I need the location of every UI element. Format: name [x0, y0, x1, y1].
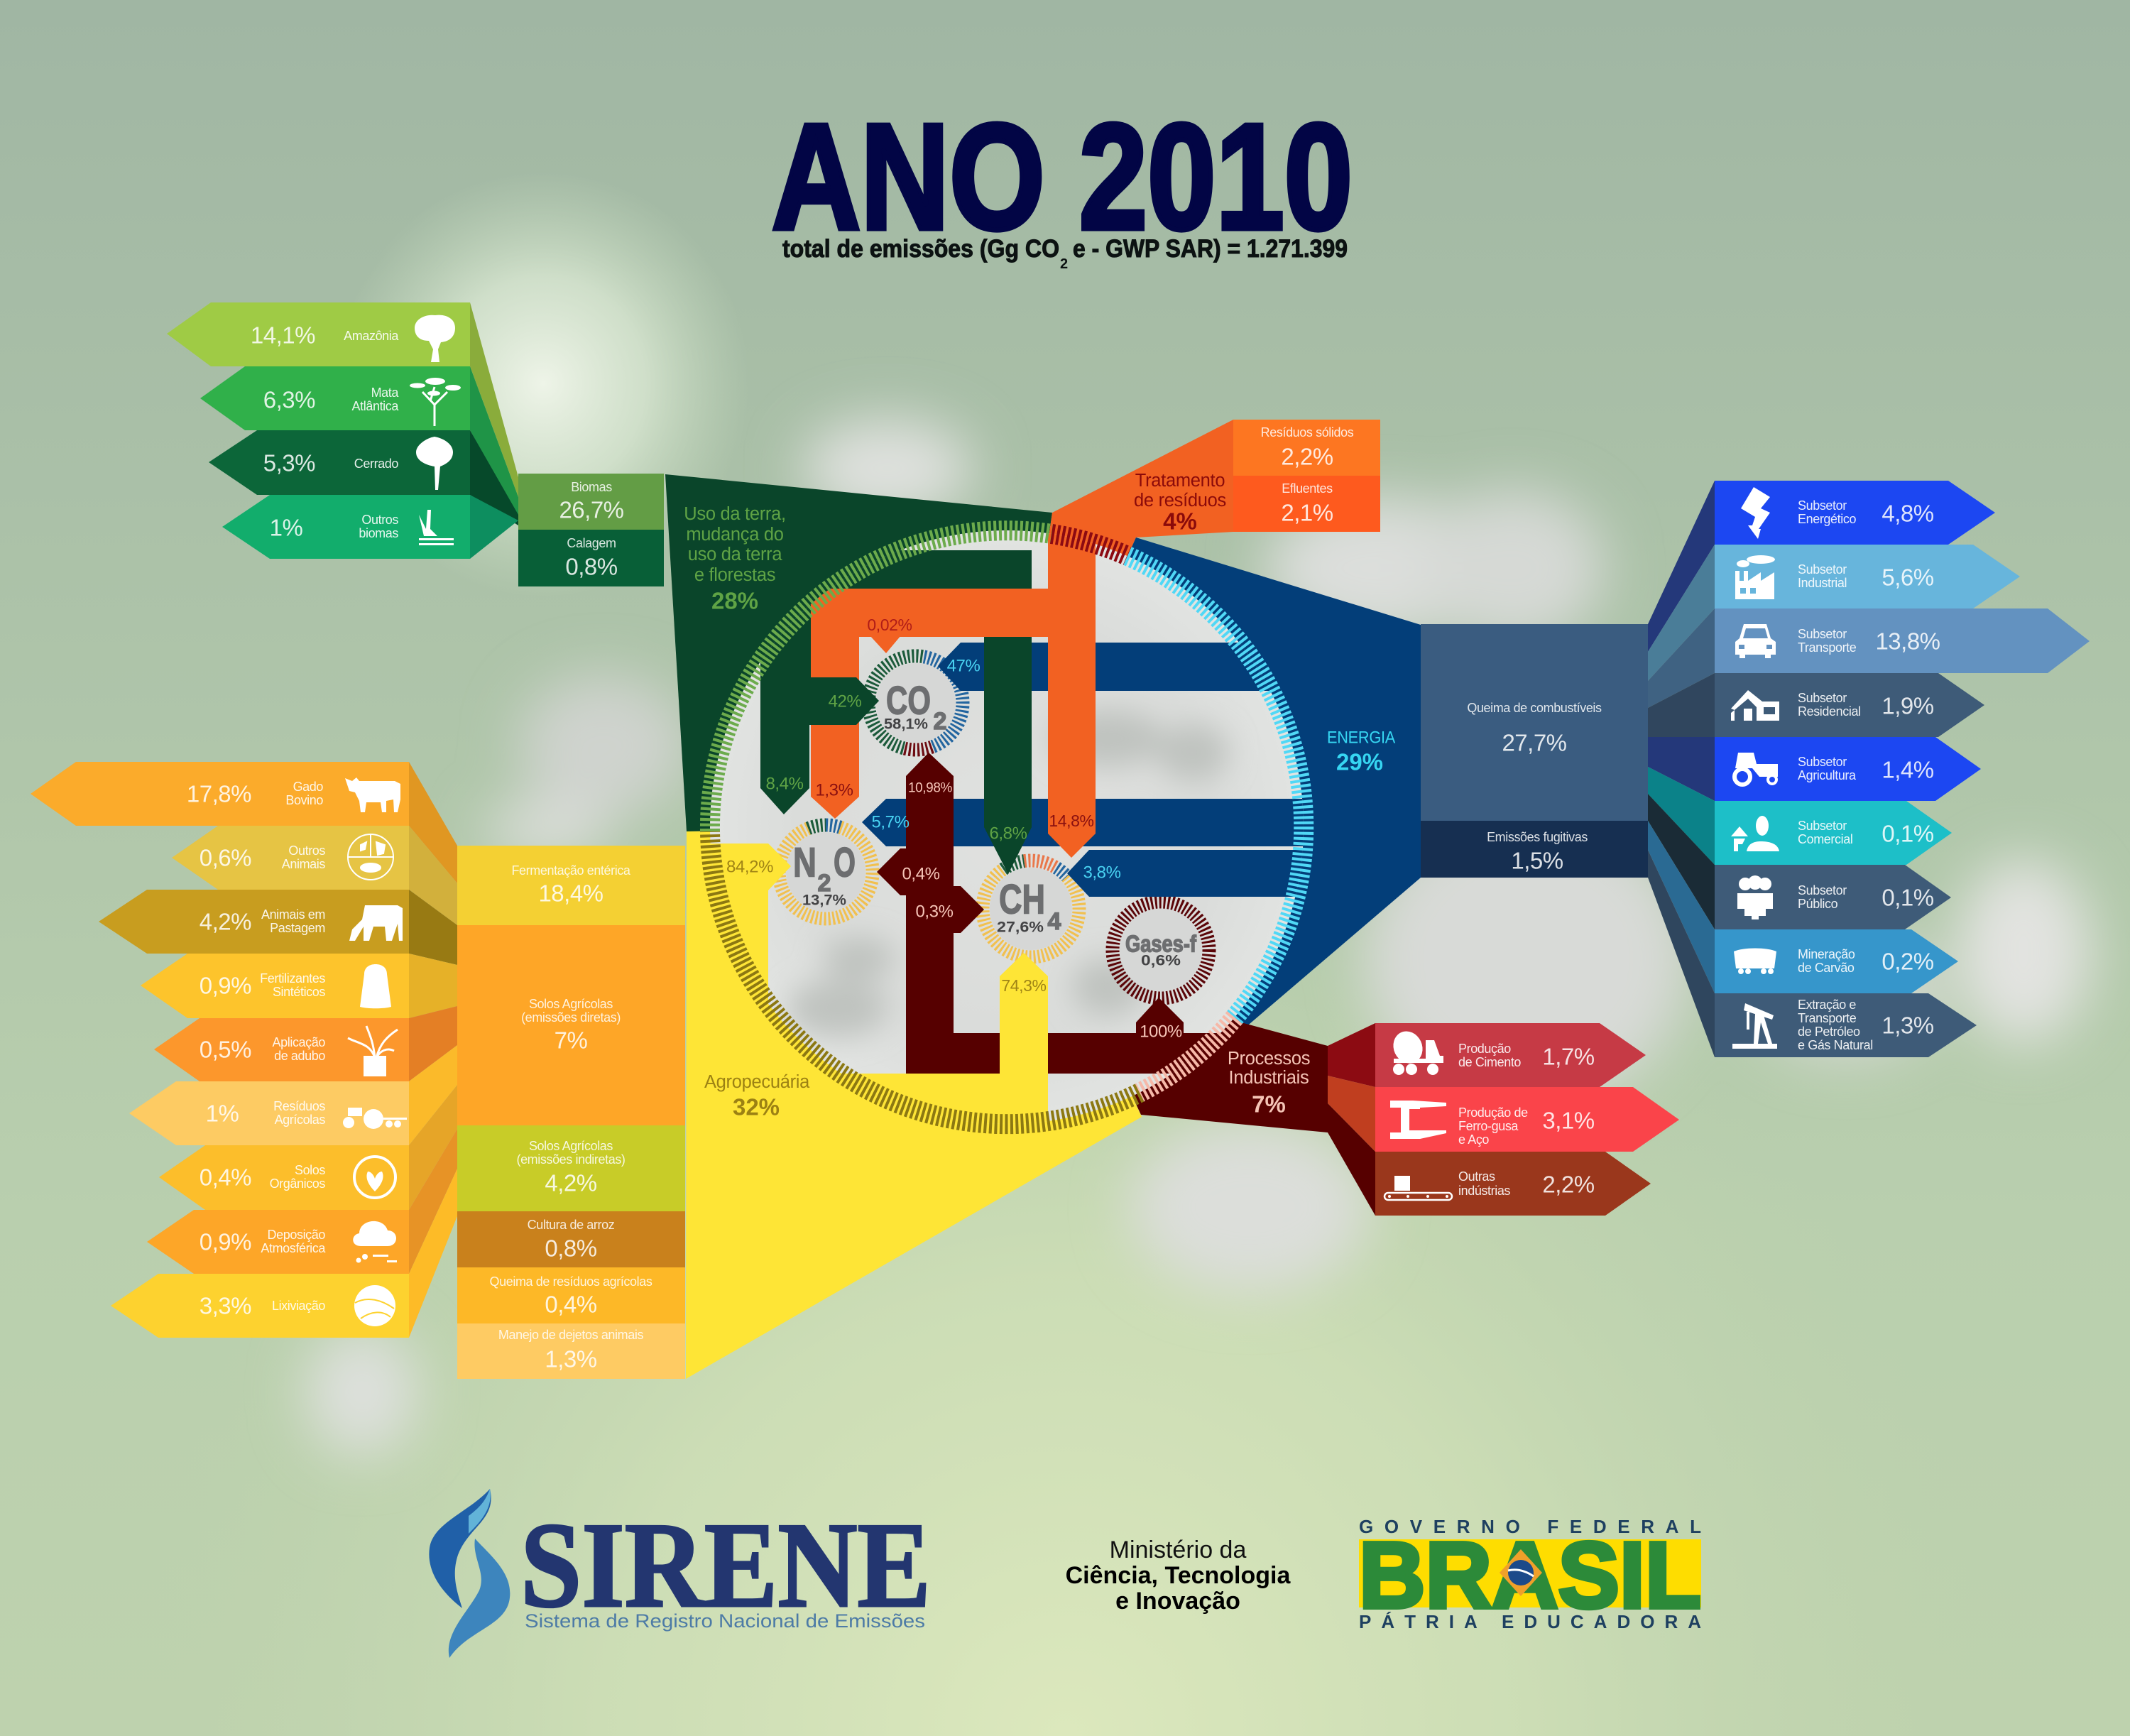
panel: Mineração de Carvão: de Carvão [1798, 961, 1855, 975]
panel: Amazônia: Amazônia [344, 329, 399, 343]
icon: conveyor [1384, 1176, 1452, 1200]
panel: Mata Atlântica [200, 366, 470, 430]
flow percent labels: 42% [829, 692, 861, 711]
panel: Processos heading [1228, 1049, 1310, 1118]
subtitle: total de emissões (Gg CO [782, 235, 1059, 263]
panel: Tratamento heading: Tratamento [1135, 471, 1225, 491]
panel: Deposição Atmosférica: Deposição [268, 1228, 325, 1242]
panel: Deposição Atmosférica [147, 1210, 409, 1274]
panel: Biomas box: 26,7% [559, 497, 624, 523]
panel: Emissões fugitivas: 1,5% [1511, 848, 1563, 873]
panel: Subsetor Residencial: Subsetor [1798, 691, 1847, 705]
panel: Subsetor Agricultura [1715, 737, 1981, 801]
panel: Efluentes box: Efluentes [1282, 481, 1333, 496]
panel: Solos Agrícolas diretas: 7% [555, 1027, 588, 1054]
panel: Aplicação de adubo [154, 1018, 409, 1081]
connectors: processos [1328, 1023, 1375, 1216]
panel: Extração de Petróleo: Extração e [1798, 998, 1856, 1012]
panel: Outros biomas [222, 495, 470, 559]
wedge: Processos Industriais [1007, 827, 1328, 1132]
flow: agropecuária bands [710, 844, 1048, 1124]
flow: energia bands [862, 643, 1321, 897]
panel: Processos heading: Processos [1228, 1049, 1310, 1069]
panel: Extração de Petróleo [1715, 993, 1977, 1057]
molecule: CO2: 58,1% [884, 716, 928, 733]
panel: Amazônia [167, 302, 470, 366]
molecule: N2O: 2 [818, 870, 831, 897]
panel: Cerrado: 5,3% [263, 450, 315, 476]
panel: Solos Agrícolas indiretas [457, 1125, 685, 1211]
logo: Governo Federal Brasil: PÁTRIA EDUCADORA [1359, 1611, 1701, 1632]
panel: Gado Bovino: 17,8% [187, 781, 251, 807]
panel: Queima de resíduos: Queima de resíduos agrícolas [490, 1274, 652, 1289]
panel: Solos Agrícolas indiretas: Solos Agrícolas [529, 1139, 613, 1153]
molecule: CH4: 27,6% [997, 919, 1044, 936]
molecule: CH4: 4 [1048, 908, 1061, 935]
panel: Fertilizantes Sintéticos [141, 954, 409, 1018]
panel: Processos heading: Industriais [1229, 1068, 1309, 1088]
panel: Produção de Cimento: 1,7% [1542, 1044, 1595, 1069]
panel: Mata Atlântica: 6,3% [263, 386, 315, 413]
panel: Resíduos sólidos box [1233, 420, 1380, 476]
panel: Solos Orgânicos: Solos [295, 1163, 325, 1177]
panel: Solos Agrícolas indiretas: 4,2% [545, 1170, 597, 1196]
panel: Solos Agrícolas diretas: (emissões diretas) [521, 1010, 621, 1025]
panel: Fertilizantes Sintéticos: Sintéticos [273, 985, 325, 999]
panel: Animais em Pastagem [99, 890, 409, 954]
panel: Uso da terra heading: e florestas [694, 565, 775, 585]
panel: Subsetor Transporte: Subsetor [1798, 627, 1847, 641]
panel: Subsetor Residencial [1715, 673, 1984, 737]
panel: Fermentação entérica [457, 846, 685, 925]
connectors: agropecuária [409, 762, 457, 1338]
panel: Agropecuária heading: 32% [733, 1093, 780, 1120]
panel: Mata Atlântica: Atlântica [352, 399, 399, 413]
panel: Gado Bovino: Gado [293, 780, 323, 794]
panel: Subsetor Industrial [1715, 545, 2020, 608]
molecule: CO2: CO [886, 677, 931, 723]
panel: Subsetor Agricultura: Subsetor [1798, 755, 1847, 769]
molecule: CH4: CH [999, 876, 1045, 923]
icon: oil pump [1732, 1003, 1777, 1049]
panel: Emissões fugitivas: Emissões fugitivas [1487, 830, 1588, 844]
panel: Subsetor Público: Público [1798, 897, 1838, 911]
flow percent labels: 1,3% [815, 781, 853, 799]
icon: landscape circle [354, 1285, 395, 1326]
panel: Queima de resíduos: 0,4% [545, 1291, 597, 1318]
flow: resíduos bands [811, 533, 1096, 858]
panel: Resíduos sólidos box: Resíduos sólidos [1261, 425, 1354, 440]
panel: Subsetor Público: 0,1% [1882, 885, 1934, 910]
central disk [710, 530, 1304, 1124]
icon: coal wagon [1734, 949, 1776, 974]
panel: Solos Agrícolas diretas [457, 925, 685, 1125]
icon: plant in pot [348, 1026, 398, 1076]
logo: Ministério: Ciência, Tecnologia [1066, 1562, 1291, 1589]
panel: Outros Animais [172, 826, 409, 890]
panel: Queima de combustíveis: 27,7% [1502, 730, 1567, 755]
panel: Outras indústrias [1375, 1152, 1651, 1216]
panel: Subsetor Comercial: Comercial [1798, 832, 1852, 846]
panel: Subsetor Transporte: Transporte [1798, 640, 1857, 655]
panel: Produção de Ferro-gusa: Produção de [1458, 1106, 1528, 1120]
panel: Uso da terra heading: Uso da terra, [684, 504, 786, 524]
panel: Subsetor Energético: 4,8% [1882, 500, 1934, 527]
panel: Uso da terra heading [684, 504, 786, 613]
panel: Aplicação de adubo: de adubo [274, 1049, 325, 1063]
panel: Extração de Petróleo: 1,3% [1882, 1012, 1934, 1038]
icon: araucaria [410, 378, 461, 426]
wedge: Uso da terra [665, 474, 1052, 831]
panel: Outros Animais: Outros [288, 844, 325, 858]
flow percent labels: 5,7% [871, 812, 910, 832]
flow percent labels: 100% [1140, 1022, 1182, 1041]
panel: Agropecuária heading: Agropecuária [704, 1072, 810, 1092]
icon: rain cloud [353, 1221, 397, 1262]
molecule: CO2: 2 [934, 708, 946, 735]
panel: Aplicação de adubo: Aplicação [273, 1035, 325, 1049]
panel: Subsetor Residencial: Residencial [1798, 704, 1861, 719]
panel: Outros Animais: 0,6% [200, 845, 251, 870]
icon: grazing cow [349, 905, 403, 941]
panel: Amazônia: 14,1% [251, 322, 315, 348]
panel: Fertilizantes Sintéticos: 0,9% [200, 973, 251, 998]
panel: Produção de Ferro-gusa [1375, 1087, 1679, 1152]
icon: tractor [1735, 753, 1778, 785]
panel: Animais em Pastagem: 4,2% [200, 909, 251, 934]
connectors: energia [1648, 481, 1715, 1057]
wedge: Energia [1007, 537, 1421, 1028]
panel: Gado Bovino: Bovino [285, 793, 323, 807]
molecule: Gases-f: 0,6% [1141, 953, 1181, 968]
panel: Processos heading: 7% [1252, 1091, 1286, 1118]
panel: Biomas box: Biomas [571, 480, 612, 494]
logo: Ministério [1066, 1536, 1291, 1615]
panel: Solos Orgânicos [159, 1145, 409, 1210]
panel: Gado Bovino [31, 762, 409, 826]
panel: Emissões fugitivas [1421, 821, 1648, 878]
panel: Resíduos Agrícolas: 1% [206, 1101, 239, 1126]
title: ANO 2010 [772, 92, 1353, 261]
molecule: Gases-f [1125, 930, 1197, 968]
panel: Cultura de arroz: 0,8% [545, 1235, 597, 1261]
panel: Calagem box [518, 530, 664, 586]
flow: processos bands [877, 753, 1218, 1074]
panel: Lixiviação [111, 1274, 409, 1338]
panel: Outros biomas: 1% [270, 514, 303, 541]
inner flows [710, 533, 1304, 1124]
panel: Subsetor Comercial: Subsetor [1798, 819, 1847, 833]
icon: cement truck [1388, 1027, 1443, 1075]
panel: Outras indústrias: 2,2% [1542, 1172, 1595, 1197]
panel: Mineração de Carvão: Mineração [1798, 947, 1855, 961]
panel: Subsetor Agricultura: 1,4% [1882, 757, 1934, 782]
panel: Subsetor Transporte: 13,8% [1875, 628, 1940, 655]
panel: Queima de combustíveis: Queima de combustíveis [1467, 701, 1602, 715]
panel: Fermentação entérica: Fermentação entérica [511, 863, 631, 878]
logo: Governo Federal Brasil: BRASIL [1359, 1523, 1701, 1627]
panel: Deposição Atmosférica: Atmosférica [261, 1241, 326, 1255]
panel: Queima de combustíveis [1421, 624, 1648, 821]
outer dashed ring [710, 530, 1304, 1124]
flow percent labels: 8,4% [765, 774, 804, 794]
icon: tractor with tiller [343, 1108, 407, 1129]
icon: cerrado tree [416, 437, 453, 490]
flow percent labels [726, 616, 1182, 1041]
icon: car [1735, 624, 1776, 658]
panel: Produção de Cimento: Produção [1458, 1042, 1511, 1056]
icon: animals circle [348, 834, 393, 880]
panel: Resíduos Agrícolas [129, 1081, 409, 1145]
panel: Extração de Petróleo: de Petróleo [1798, 1025, 1860, 1039]
panel: Subsetor Agricultura: Agricultura [1798, 768, 1857, 782]
icon: cow [345, 777, 400, 812]
panel: Calagem box: 0,8% [565, 554, 618, 579]
icon: people [1737, 875, 1773, 919]
logo: Ministério: e Inovação [1115, 1588, 1240, 1615]
logo: Ministério: Ministério da [1110, 1536, 1246, 1563]
panel: Subsetor Energético [1715, 481, 1995, 545]
icon: sack [360, 964, 391, 1008]
panel: Tratamento heading [1134, 471, 1226, 534]
panel: Subsetor Energético: Subsetor [1798, 498, 1847, 513]
icon: house [1731, 690, 1779, 721]
panel: Calagem box: Calagem [567, 536, 616, 550]
panel: Resíduos Agrícolas: Agrícolas [275, 1113, 325, 1127]
panel: Cultura de arroz: Cultura de arroz [528, 1218, 615, 1232]
panel: Produção de Ferro-gusa: 3,1% [1542, 1108, 1595, 1133]
logo: SIRENE swoosh [429, 1489, 510, 1658]
panel: Manejo de dejetos: 1,3% [545, 1346, 597, 1372]
panel: Queima de resíduos [457, 1267, 685, 1323]
panel: Fertilizantes Sintéticos: Fertilizantes [260, 971, 325, 986]
molecule: N2O: 13,7% [802, 892, 846, 909]
panel: Efluentes box [1233, 476, 1380, 532]
panel: Uso da terra heading: uso da terra [688, 545, 782, 564]
panel: Lixiviação: 3,3% [200, 1292, 251, 1319]
panel: Energia heading: ENERGIA [1327, 728, 1395, 747]
panel: Subsetor Industrial: 5,6% [1882, 564, 1934, 591]
wedge: Tratamento de resíduos [1007, 420, 1233, 827]
panel: Deposição Atmosférica: 0,9% [200, 1228, 251, 1255]
panel: Uso da terra heading: mudança do [686, 525, 784, 545]
panel: Subsetor Público [1715, 865, 1951, 929]
panel: Fermentação entérica: 18,4% [538, 880, 604, 906]
panel: Tratamento heading: de resíduos [1134, 491, 1226, 511]
molecule: N2O [793, 839, 856, 909]
panel: Resíduos Agrícolas: Resíduos [273, 1099, 325, 1113]
panel: Lixiviação: Lixiviação [272, 1299, 325, 1313]
panel: Outros biomas: biomas [359, 526, 398, 540]
icon: tree [415, 315, 455, 362]
panel: Mineração de Carvão: 0,2% [1882, 949, 1934, 974]
molecule: N2O: O [834, 839, 856, 886]
panel: Outras indústrias: Outras [1458, 1169, 1495, 1184]
panel: Tratamento heading: 4% [1163, 508, 1197, 534]
panel: Cultura de arroz [457, 1211, 685, 1267]
logo: SIRENE wordmark: SIRENE [520, 1498, 931, 1633]
icon: leaf coin [354, 1157, 395, 1198]
panel: Produção de Cimento: de Cimento [1458, 1055, 1521, 1069]
panel: Subsetor Público: Subsetor [1798, 883, 1847, 897]
panel: Efluentes box: 2,1% [1281, 500, 1333, 525]
panel: Solos Agrícolas indiretas: (emissões indiretas) [516, 1152, 626, 1167]
panel: Extração de Petróleo: Transporte [1798, 1011, 1857, 1025]
panel: Subsetor Comercial: 0,1% [1882, 821, 1934, 846]
panel: Subsetor Transporte [1715, 608, 2090, 673]
flow percent labels: 10,98% [908, 781, 953, 795]
panel: Subsetor Residencial: 1,9% [1882, 693, 1934, 719]
panel: Outros Animais: Animais [282, 857, 325, 871]
panel: Agropecuária heading [704, 1072, 810, 1120]
flow percent labels: 0,4% [902, 865, 940, 883]
panel: Manejo de dejetos [457, 1323, 685, 1379]
panel: Produção de Ferro-gusa: e Aço [1458, 1132, 1489, 1147]
panel: Manejo de dejetos: Manejo de dejetos animais [498, 1328, 643, 1342]
flow: uso da terra bands [760, 550, 1032, 874]
panel: Solos Orgânicos: Orgânicos [270, 1177, 325, 1191]
panel: Mata Atlântica: Mata [371, 386, 399, 400]
panel: Energia heading: 29% [1336, 748, 1383, 775]
panel: Solos Orgânicos: 0,4% [200, 1164, 251, 1190]
connectors: biomas [470, 302, 518, 559]
icon: steel beam [1390, 1101, 1446, 1139]
panel: Outras indústrias: indústrias [1458, 1184, 1510, 1198]
flow percent labels: 0,02% [867, 616, 912, 634]
subtitle [782, 235, 1348, 272]
panel: Outros biomas: Outros [361, 513, 398, 527]
panel: Resíduos sólidos box: 2,2% [1281, 443, 1333, 470]
icon: factory [1735, 555, 1775, 599]
flow percent labels: 14,8% [1049, 812, 1094, 830]
panel: Animais em Pastagem: Animais em [261, 907, 325, 922]
subtitle: 2 [1060, 256, 1068, 272]
flow percent labels: 74,3% [1001, 976, 1047, 995]
panel: Extração de Petróleo: e Gás Natural [1798, 1038, 1873, 1052]
flow percent labels: 6,8% [989, 824, 1027, 844]
flow percent labels: 0,3% [915, 902, 954, 922]
panel: Produção de Ferro-gusa: Ferro-gusa [1458, 1119, 1519, 1133]
icon: reeds [419, 510, 454, 545]
panel: Uso da terra heading: 28% [711, 588, 758, 613]
panel: Subsetor Comercial [1715, 801, 1952, 865]
molecule: Gases-f: Gases-f [1125, 930, 1197, 957]
panel: Aplicação de adubo: 0,5% [200, 1037, 251, 1062]
wedge: Agropecuária [686, 827, 1142, 1379]
flow percent labels: 3,8% [1083, 863, 1121, 882]
logo: Governo Federal Brasil: GOVERNO FEDERAL [1359, 1516, 1701, 1537]
panel: Energia heading [1327, 728, 1395, 775]
panel: Produção de Cimento [1375, 1023, 1646, 1087]
molecule: N2O: N [793, 839, 816, 886]
panel: Animais em Pastagem: Pastagem [270, 921, 325, 935]
panel: Subsetor Industrial: Industrial [1798, 576, 1847, 590]
subtitle: e - GWP SAR) = 1.271.399 [1073, 235, 1348, 263]
panel: Subsetor Industrial: Subsetor [1798, 562, 1847, 577]
flow percent labels: 47% [947, 656, 980, 676]
icon: lightning bolt [1741, 487, 1770, 539]
molecule rings [779, 656, 1209, 998]
panel: Cerrado: Cerrado [354, 457, 398, 471]
panel: Mineração de Carvão [1715, 929, 1958, 993]
panel: Cerrado [209, 430, 470, 495]
panel: Subsetor Energético: Energético [1798, 512, 1856, 526]
icon: person at counter [1731, 816, 1779, 851]
panel: Biomas box [518, 474, 664, 530]
flow percent labels: 84,2% [726, 858, 773, 876]
panel: Solos Agrícolas diretas: Solos Agrícolas [529, 997, 613, 1011]
logo: SIRENE tagline: Sistema de Registro Nacional de Emissões [525, 1610, 925, 1632]
